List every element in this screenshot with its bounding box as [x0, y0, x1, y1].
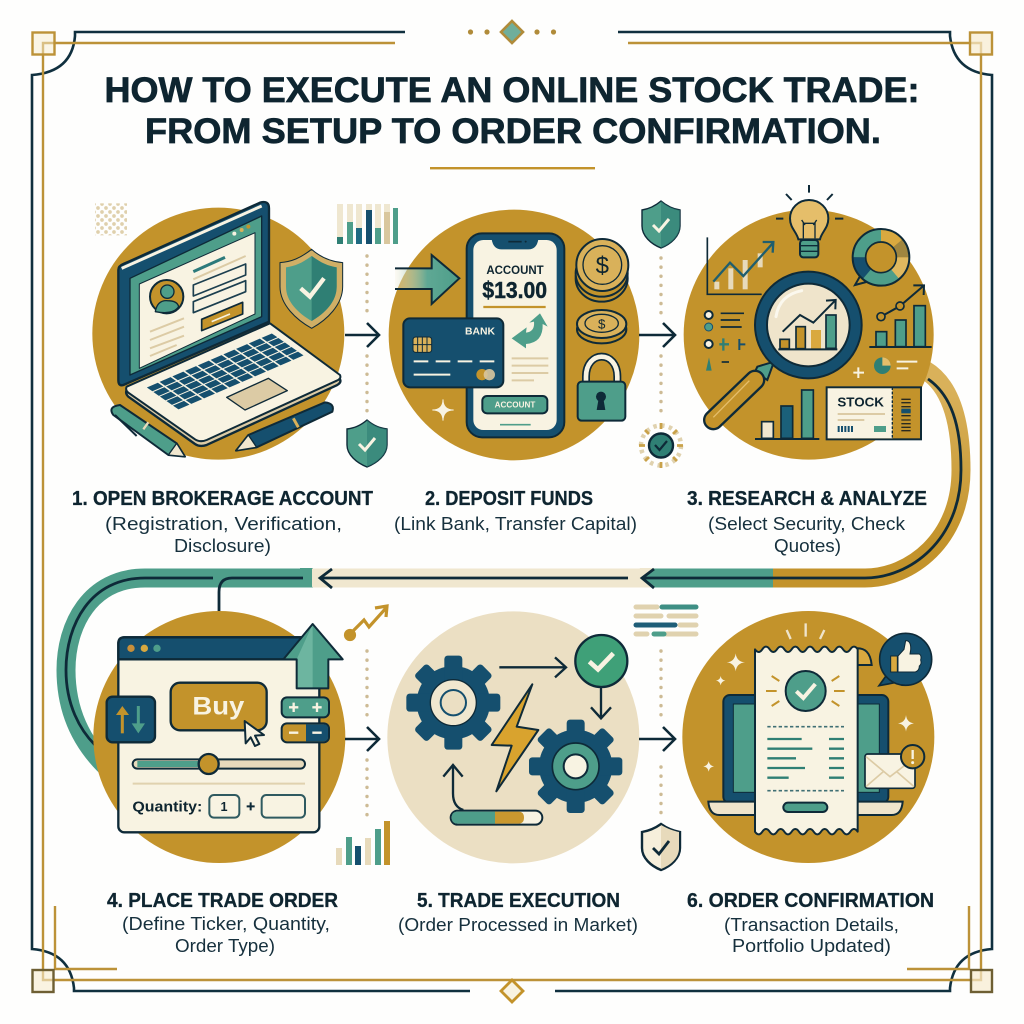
- small trend arrow: [346, 606, 387, 640]
- small check shield: [642, 824, 680, 870]
- icon: left gear: [406, 656, 500, 750]
- bottom ornament: [501, 980, 523, 1002]
- dotted divider 2: [659, 258, 663, 413]
- step 2 label: (Link Bank, Transfer Capital): [394, 514, 637, 534]
- icon: order window: [118, 637, 319, 832]
- step 3 label: [687, 488, 927, 556]
- icon: thumbs up bubble: [879, 633, 932, 686]
- icon: left data list: [705, 311, 745, 371]
- step 5 label: 5. TRADE EXECUTION: [417, 890, 620, 912]
- icon: order window: Buy: [192, 693, 244, 721]
- icon: check circle: [575, 635, 627, 687]
- step 5 label: (Order Processed in Market): [398, 915, 638, 935]
- icon: right gear: [529, 720, 622, 813]
- title underline: [430, 167, 595, 169]
- icon: padlock: [578, 357, 625, 421]
- dotted divider 4: [365, 651, 369, 816]
- top ornament: [468, 21, 556, 43]
- small bar chart: [337, 204, 398, 244]
- step 4 label: Order Type): [175, 936, 275, 956]
- icon: donut speech bubble: [850, 227, 912, 288]
- icon: up-down arrows box: [107, 697, 155, 742]
- step 1 label: (Registration, Verification,: [105, 514, 342, 534]
- icon: arrow down to gear: [591, 687, 611, 718]
- icon: progress bar: [451, 811, 542, 825]
- step 1 label: Disclosure): [174, 536, 271, 556]
- icon: bottom bar chart: [755, 390, 819, 439]
- icon: sparkle: [432, 399, 454, 421]
- icon: phone: ACCOUNT: [486, 263, 544, 277]
- step 1 label: [72, 488, 373, 556]
- dotted divider 1: [365, 256, 369, 415]
- icon: left pen: [111, 405, 185, 457]
- icon: right pen: [236, 402, 333, 451]
- icon: order window: Quantity:: [132, 800, 202, 816]
- step 6 label: 6. ORDER CONFIRMATION: [687, 890, 934, 912]
- panel 1: open brokerage account: [92, 202, 344, 460]
- step 3 label: Quotes): [774, 536, 841, 556]
- icon: up arrow: [283, 624, 343, 688]
- panel 3: research and analyze: [684, 185, 934, 460]
- panel 2: deposit funds: [389, 210, 639, 460]
- icon: receipt: [755, 647, 872, 834]
- icon: arrow into phone: [395, 255, 459, 304]
- icon: minus buttons: [282, 723, 329, 742]
- step 3 label: 3. RESEARCH & ANALYZE: [687, 488, 927, 510]
- arrow: step 4 to 5: [345, 727, 379, 751]
- step 6 label: [687, 890, 934, 956]
- icon: right bar chart: [869, 285, 932, 347]
- arrow: step 1 to 2: [345, 323, 379, 347]
- icon: laptop behind receipt: [708, 695, 903, 815]
- icon: flat coin: $: [598, 316, 606, 331]
- panel 4: place trade order: [93, 611, 345, 863]
- dotted divider 5: [659, 651, 663, 813]
- icon: flat coin: [577, 310, 626, 343]
- icon: stock ticket: [827, 387, 921, 439]
- small badge icon: [639, 423, 683, 468]
- title: HOW TO EXECUTE AN ONLINE STOCK TRADE:: [104, 71, 920, 110]
- step 5 label: [398, 890, 638, 935]
- icon: bank card: [403, 318, 503, 387]
- small shield icon top: [642, 201, 680, 248]
- icon: phone: ACCOUNT: [495, 401, 535, 410]
- step 4 label: 4. PLACE TRADE ORDER: [107, 890, 339, 912]
- icon: order window: 1: [220, 800, 228, 814]
- icon: phone: $13.00: [482, 277, 547, 303]
- icon: plus buttons: [282, 697, 329, 717]
- title: [104, 71, 920, 151]
- icon: phone: [467, 233, 564, 437]
- arrow: step 5 to 6: [639, 727, 675, 751]
- icon: arrow to check: [499, 657, 566, 677]
- icon: bank card: BANK: [465, 327, 495, 338]
- icon: coin stack: $: [596, 252, 609, 279]
- icon: cursor: [245, 721, 264, 746]
- icon: shield: [280, 249, 343, 328]
- step 2 label: 2. DEPOSIT FUNDS: [425, 488, 593, 510]
- step 2 label: [394, 488, 637, 534]
- icon: line chart: [707, 237, 773, 294]
- icon: laptop: [118, 202, 340, 446]
- step 6 label: (Transaction Details,: [724, 915, 899, 935]
- panel 5: trade execution: [387, 611, 639, 863]
- icon: envelope with alert: [865, 745, 924, 788]
- small shield icon: [347, 420, 387, 467]
- step 3 label: (Select Security, Check: [708, 514, 906, 534]
- step 1 label: 1. OPEN BROKERAGE ACCOUNT: [72, 488, 373, 510]
- icon: lightning bolt: [492, 684, 538, 791]
- step 4 label: (Define Ticker, Quantity,: [122, 914, 330, 934]
- small legend lines: [636, 607, 696, 634]
- title: FROM SETUP TO ORDER CONFIRMATION.: [145, 112, 881, 151]
- icon: sparkles and rays: [703, 623, 914, 772]
- icon: stock ticket: STOCK: [837, 396, 885, 410]
- small labels on circle: [853, 357, 917, 378]
- small bar chart row 2: [336, 821, 390, 865]
- connector band between rows: [66, 370, 961, 772]
- step 6 label: Portfolio Updated): [732, 936, 891, 956]
- icon: light bulb: [776, 185, 843, 257]
- icon: coin stack: [576, 239, 628, 302]
- icon: magnifying glass: [713, 272, 862, 420]
- step 4 label: [107, 890, 339, 956]
- arrow: step 2 to 3: [639, 323, 675, 347]
- icon: arrow up from progress: [443, 765, 463, 810]
- panel 6: order confirmation: [682, 611, 934, 863]
